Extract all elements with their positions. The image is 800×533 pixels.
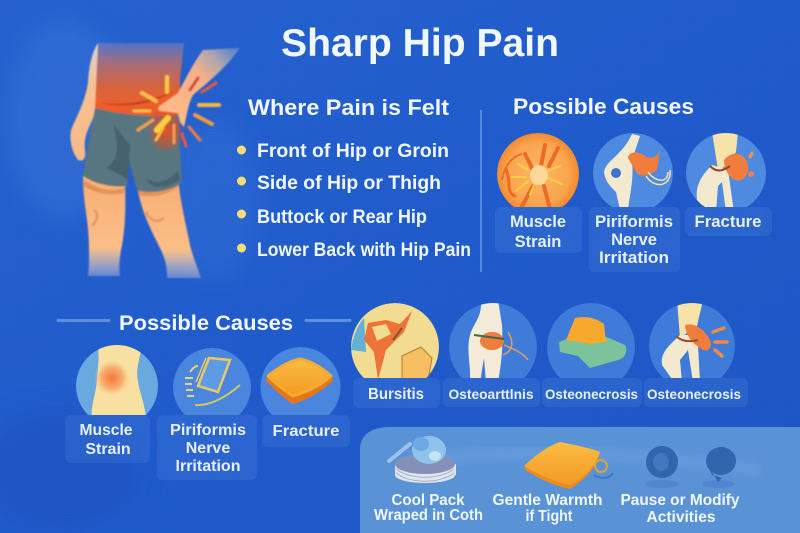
icon: fracture <box>686 132 766 213</box>
labels: Irritation <box>176 458 240 475</box>
labels: Bursitis <box>368 386 424 403</box>
panel: lower causes right: Osteonecrosis <box>647 386 741 402</box>
icon: head silhouette side <box>702 447 736 488</box>
panel: lower causes right: Osteonecrosis <box>545 386 638 402</box>
icon: cool pack <box>389 436 456 483</box>
labels: Nerve <box>611 231 657 249</box>
bullet item 2: Side of Hip or Thigh <box>257 173 441 194</box>
left arm <box>70 43 98 161</box>
labels: Irritation <box>599 249 669 267</box>
heading: where pain is felt: Where Pain is Felt <box>248 95 450 120</box>
labels: Fracture <box>272 423 340 440</box>
pain glow <box>147 106 185 154</box>
icon: osteoarthritis <box>449 303 537 378</box>
labels: Strain <box>85 441 131 458</box>
labels: Cool Pack <box>392 492 465 509</box>
shorts <box>83 108 182 192</box>
heading: possible causes, top: Possible Causes <box>513 94 694 119</box>
panel: lower causes right <box>351 300 748 408</box>
pain rays <box>134 77 219 146</box>
labels: Muscle <box>510 213 566 231</box>
labels: Wraped in Coth <box>374 507 483 524</box>
labels: Strain <box>515 233 561 251</box>
figure: person holding painful hip <box>70 43 240 278</box>
labels: Piriformis <box>170 422 246 439</box>
label panels <box>495 207 772 272</box>
heading: possible causes, lower: Possible Causes <box>119 312 293 335</box>
labels: if Tight <box>526 508 572 525</box>
bullet item 1: Front of Hip or Groin <box>257 141 449 162</box>
icon: piriformis nerve irritation <box>593 133 673 213</box>
panel: lower causes right: Osteoarttlnis <box>448 386 534 402</box>
labels <box>510 213 762 267</box>
labels: Pause or Modify <box>620 492 740 509</box>
panel: self care <box>360 427 800 533</box>
right arm and hand <box>158 48 240 127</box>
labels: Nerve <box>186 440 230 457</box>
labels: Muscle <box>80 422 133 439</box>
icon: muscle strain <box>497 133 579 215</box>
left leg <box>83 176 125 276</box>
icon: bursitis <box>351 303 439 378</box>
title: Sharp Hip Pain <box>281 22 559 65</box>
labels: Fracture <box>694 213 762 231</box>
panel: top causes <box>495 132 772 272</box>
label panels <box>353 378 748 408</box>
labels <box>80 422 340 475</box>
labels <box>374 492 740 526</box>
arm marks <box>190 78 198 90</box>
icon: warm pad <box>524 442 613 489</box>
right leg <box>137 178 201 278</box>
labels: Gentle Warmth <box>492 492 602 509</box>
label panels <box>65 415 350 480</box>
knee shading <box>92 210 164 226</box>
bullet item 4: Lower Back with Hip Pain <box>257 240 471 261</box>
labels: Piriformis <box>595 213 673 231</box>
shirt <box>95 43 184 117</box>
icon: warm pad <box>260 347 340 415</box>
bullet item 3: Buttock or Rear Hip <box>257 207 427 228</box>
icon: piriformis <box>173 348 251 415</box>
labels: Activities <box>646 509 716 526</box>
icon: muscle strain <box>76 345 158 415</box>
list: pain locations <box>237 141 471 261</box>
icon: osteonecrosis pack and towel <box>547 303 635 378</box>
icon: osteonecrosis hip <box>649 303 735 378</box>
panel: lower causes left <box>65 345 350 480</box>
hem shadows <box>84 180 178 196</box>
icon: head silhouette front <box>645 446 679 488</box>
